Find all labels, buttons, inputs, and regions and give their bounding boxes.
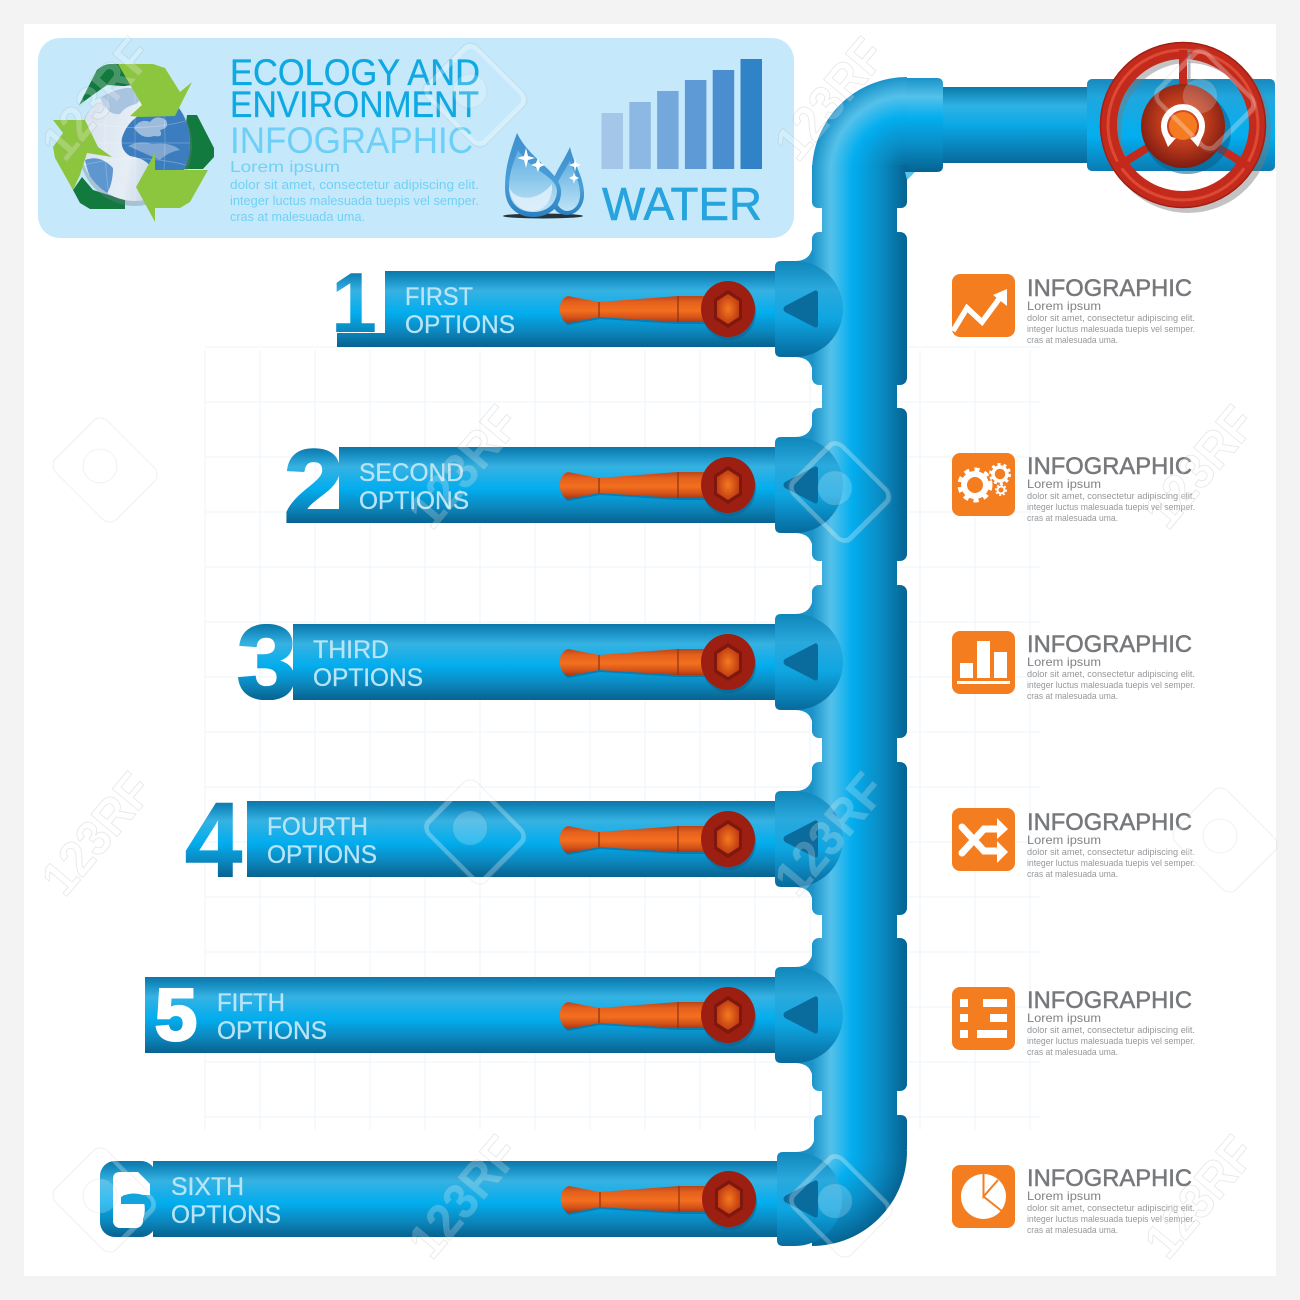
item 2 text: Lorem ipsum [1027,477,1101,491]
item 3 text [1027,631,1195,702]
item 5 text: Lorem ipsum [1027,1011,1101,1025]
step 4 label: FOURTH [267,813,368,841]
main pipe: top elbow [812,77,943,234]
step 4 label [267,813,377,869]
icon: water drops [503,133,584,218]
number 5: 5 [155,975,197,1056]
item 4 text [1027,809,1195,880]
item 6: pie [952,1165,1195,1236]
item 3 text: INFOGRAPHIC [1027,631,1192,658]
water label: WATER [602,178,762,230]
number 2: 2 [284,429,344,545]
step 5 label [217,989,327,1045]
item 6 text: integer luctus malesuada tuepis vel semper. [1027,1214,1195,1225]
step 3 label: OPTIONS [313,664,423,692]
main pipe: top horizontal [943,87,1089,163]
item 2 text: dolor sit amet, consectetur adipiscing elit. [1027,491,1195,502]
item 6 text: cras at malesuada uma. [1027,1225,1118,1236]
item 5 text [1027,987,1195,1058]
step 5 label: OPTIONS [217,1017,327,1045]
tee joint 5 [775,938,907,1091]
step 2 [284,408,907,561]
heading: ENVIRONMENT [230,84,479,125]
step 4 [185,762,907,915]
text block: Lorem ipsum [230,159,340,176]
item 5 text: cras at malesuada uma. [1027,1047,1118,1058]
item 4 text: INFOGRAPHIC [1027,809,1192,836]
bar chart [602,59,762,169]
recycle arrow top [118,64,192,117]
recycle arrow bottom [136,153,208,222]
text block: dolor sit amet, consectetur adipiscing elit. [230,178,479,192]
item 5 text: integer luctus malesuada tuepis vel semper. [1027,1036,1195,1047]
item 4 text: integer luctus malesuada tuepis vel semper. [1027,858,1195,869]
tee joint 3 [775,585,907,738]
tee joint 1 [775,232,907,385]
valve handle 5 [560,987,756,1046]
icon: rotate arrow [1163,107,1203,147]
valve handle 1 [560,281,756,340]
item 1 text: cras at malesuada uma. [1027,335,1118,346]
item 6 text: Lorem ipsum [1027,1189,1101,1203]
step 3 [237,585,907,738]
step 2 label [359,459,469,515]
step 4 label: OPTIONS [267,841,377,869]
heading [230,52,480,161]
step 1 label [405,283,515,339]
tee joint 4 [775,762,907,915]
item 5 text: dolor sit amet, consectetur adipiscing elit. [1027,1025,1195,1036]
recycle arrow left [53,120,112,190]
step 3 label: THIRD [313,636,389,664]
item 2 text: cras at malesuada uma. [1027,513,1118,524]
number 4: 4 [185,780,242,900]
step 1 label: OPTIONS [405,311,515,339]
valve handle 4 [560,811,756,870]
item 6 text: dolor sit amet, consectetur adipiscing elit. [1027,1203,1195,1214]
icon: growth arrow [952,274,1015,337]
item 5 text: INFOGRAPHIC [1027,987,1192,1014]
number 6: 6 [113,1159,147,1242]
valve handle 2 [560,457,756,516]
step 6 label [171,1173,281,1229]
step 1 label: FIRST [405,283,473,311]
icon: bars [952,631,1015,694]
item 1 text: Lorem ipsum [1027,299,1101,313]
text block: integer luctus malesuada tuepis vel semper. [230,194,479,208]
icon: pie chart [952,1165,1015,1228]
item 2 text [1027,453,1195,524]
item 1 text: dolor sit amet, consectetur adipiscing elit. [1027,313,1195,324]
text block: cras at malesuada uma. [230,210,365,224]
item 5: list [952,987,1195,1058]
item 2 text: integer luctus malesuada tuepis vel semper. [1027,502,1195,513]
item 2 text: INFOGRAPHIC [1027,453,1192,480]
number 1: 1 [331,256,377,351]
icon: gears [952,453,1015,516]
item 4 text: Lorem ipsum [1027,833,1101,847]
icon: list [952,987,1015,1050]
item 1 text [1027,275,1195,346]
heading: ECOLOGY AND [230,52,480,93]
icon: recycling globe [53,64,214,222]
text block [230,159,479,224]
item 3 text: integer luctus malesuada tuepis vel semper. [1027,680,1195,691]
step 6 [100,1135,842,1246]
step 5 label: FIFTH [217,989,285,1017]
item 6 text [1027,1165,1195,1236]
step 2 label: SECOND [359,459,464,487]
item 3 text: cras at malesuada uma. [1027,691,1118,702]
panel: header [38,38,794,238]
bottom elbow [812,1115,907,1246]
item 1 text: INFOGRAPHIC [1027,275,1192,302]
pipe necks [822,383,897,1117]
item 4 text: dolor sit amet, consectetur adipiscing elit. [1027,847,1195,858]
valve wheel [1100,42,1266,208]
step 5 [145,938,907,1091]
item 4 text: cras at malesuada uma. [1027,869,1118,880]
icon: shuffle arrows [952,808,1015,871]
heading: INFOGRAPHIC [230,120,473,161]
tee joint 2 [775,408,907,561]
item 3 text: Lorem ipsum [1027,655,1101,669]
number 3: 3 [237,605,297,721]
valve handle 3 [560,634,756,693]
item 3 text: dolor sit amet, consectetur adipiscing elit. [1027,669,1195,680]
item 1: growth [952,274,1195,346]
step 6 label: SIXTH [171,1173,244,1201]
elbow hub 6 [777,1135,842,1246]
item 4: shuffle [952,808,1195,880]
step 6 label: OPTIONS [171,1201,281,1229]
valve handle 6 [561,1171,757,1230]
item 1 text: integer luctus malesuada tuepis vel semper. [1027,324,1195,335]
step 3 label [313,636,423,692]
item 3: statistics [952,631,1195,702]
item 2: settings [952,453,1195,524]
step 2 label: OPTIONS [359,487,469,515]
item 6 text: INFOGRAPHIC [1027,1165,1192,1192]
valve housing [1087,79,1275,171]
step 1 [331,232,907,385]
